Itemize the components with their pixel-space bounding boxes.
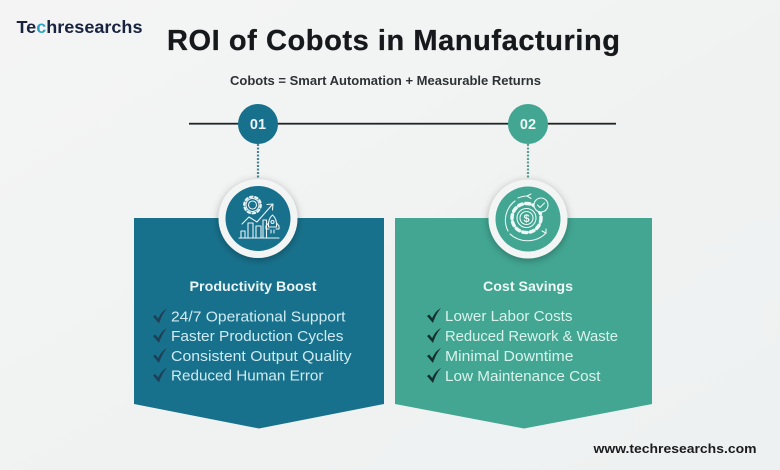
panel shape bbox=[134, 218, 384, 428]
step badge 01 bbox=[238, 104, 278, 144]
list: productivity items: 24/7 Operational Support bbox=[171, 310, 346, 326]
list: productivity items: Reduced Human Error bbox=[171, 368, 324, 384]
list: cost savings items: Minimal Downtime bbox=[445, 349, 574, 365]
list: cost savings items: Reduced Rework & Waste bbox=[445, 329, 618, 345]
list: productivity items bbox=[171, 310, 352, 384]
list: productivity items: Faster Production Cycles bbox=[171, 329, 344, 345]
step badge 01: 01 bbox=[250, 117, 266, 133]
subtitle: Cobots = Smart Automation + Measurable Returns bbox=[230, 74, 541, 88]
icon: cost savings gear with dollar and check: $ bbox=[523, 213, 530, 225]
connector 02 bbox=[527, 144, 529, 179]
heading: productivity boost: Productivity Boost bbox=[190, 278, 317, 294]
timeline line bbox=[189, 123, 616, 125]
step badge 02 bbox=[508, 104, 548, 144]
title: ROI of Cobots in Manufacturing bbox=[167, 25, 620, 57]
icon: productivity gear, growth chart and rocket bbox=[218, 179, 298, 258]
list: cost savings items: Low Maintenance Cost bbox=[445, 369, 600, 385]
logo: Techresearchs: Techresearchs bbox=[16, 17, 143, 37]
list: cost savings items bbox=[445, 309, 618, 385]
list: cost savings items: Lower Labor Costs bbox=[445, 309, 572, 325]
checkmarks: productivity bbox=[153, 308, 167, 382]
panel shape bbox=[395, 218, 652, 428]
step badge 02: 02 bbox=[520, 117, 536, 133]
checkmarks: cost savings bbox=[427, 308, 441, 383]
icon: cost savings gear with dollar and check bbox=[488, 180, 568, 258]
panel: cost savings bbox=[395, 104, 652, 428]
website url: www.techresearchs.com bbox=[592, 441, 756, 456]
panel: productivity boost bbox=[134, 104, 384, 428]
list: productivity items: Consistent Output Quality bbox=[171, 349, 352, 365]
connector 01 bbox=[257, 144, 259, 179]
heading: cost savings: Cost Savings bbox=[483, 278, 573, 294]
